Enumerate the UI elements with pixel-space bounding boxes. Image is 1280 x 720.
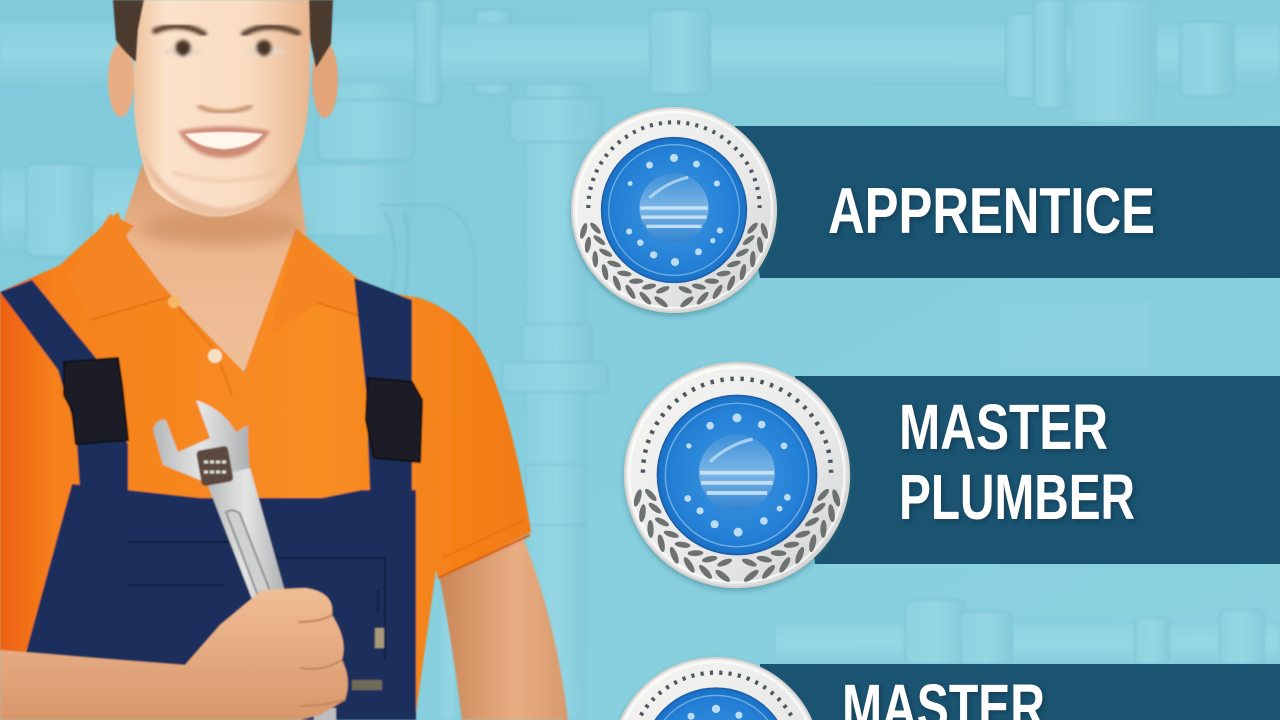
- face: [134, 0, 310, 217]
- right arm: [438, 535, 568, 720]
- forearm and hand: [0, 588, 348, 720]
- label: MASTER: [899, 391, 1108, 463]
- shirt collar and placket: [68, 214, 530, 578]
- banner background: [795, 376, 1280, 564]
- smile: [178, 126, 270, 158]
- badge: third level seal: [612, 658, 820, 720]
- person: smiling plumber with wrench: [0, 0, 568, 720]
- nose: [198, 106, 252, 112]
- eyebrows: [155, 26, 298, 34]
- banner background: [735, 126, 1280, 278]
- chin shadow on neck: [140, 210, 304, 246]
- eyes: [162, 40, 286, 56]
- neck: [120, 160, 306, 375]
- orange shirt: [0, 212, 531, 720]
- label: [899, 391, 1135, 533]
- wrench: [153, 400, 286, 604]
- left strap buckle: [64, 358, 128, 444]
- banner: master plumber: [795, 376, 1280, 564]
- head: [108, 0, 338, 246]
- hair: [113, 0, 333, 68]
- banner background: [760, 664, 1280, 720]
- navy overalls: [0, 278, 416, 720]
- ears: [108, 43, 134, 117]
- banner: third level: [760, 664, 1280, 720]
- label: APPRENTICE: [828, 174, 1155, 247]
- label: PLUMBER: [899, 461, 1135, 533]
- overall pocket details: [128, 542, 385, 682]
- badge: apprentice seal: [572, 108, 776, 312]
- badge: master plumber seal: [625, 363, 849, 587]
- banner: apprentice: [735, 126, 1280, 278]
- handle below hand: [314, 708, 336, 720]
- jaw shading: [142, 150, 300, 217]
- right strap buckle: [366, 378, 422, 462]
